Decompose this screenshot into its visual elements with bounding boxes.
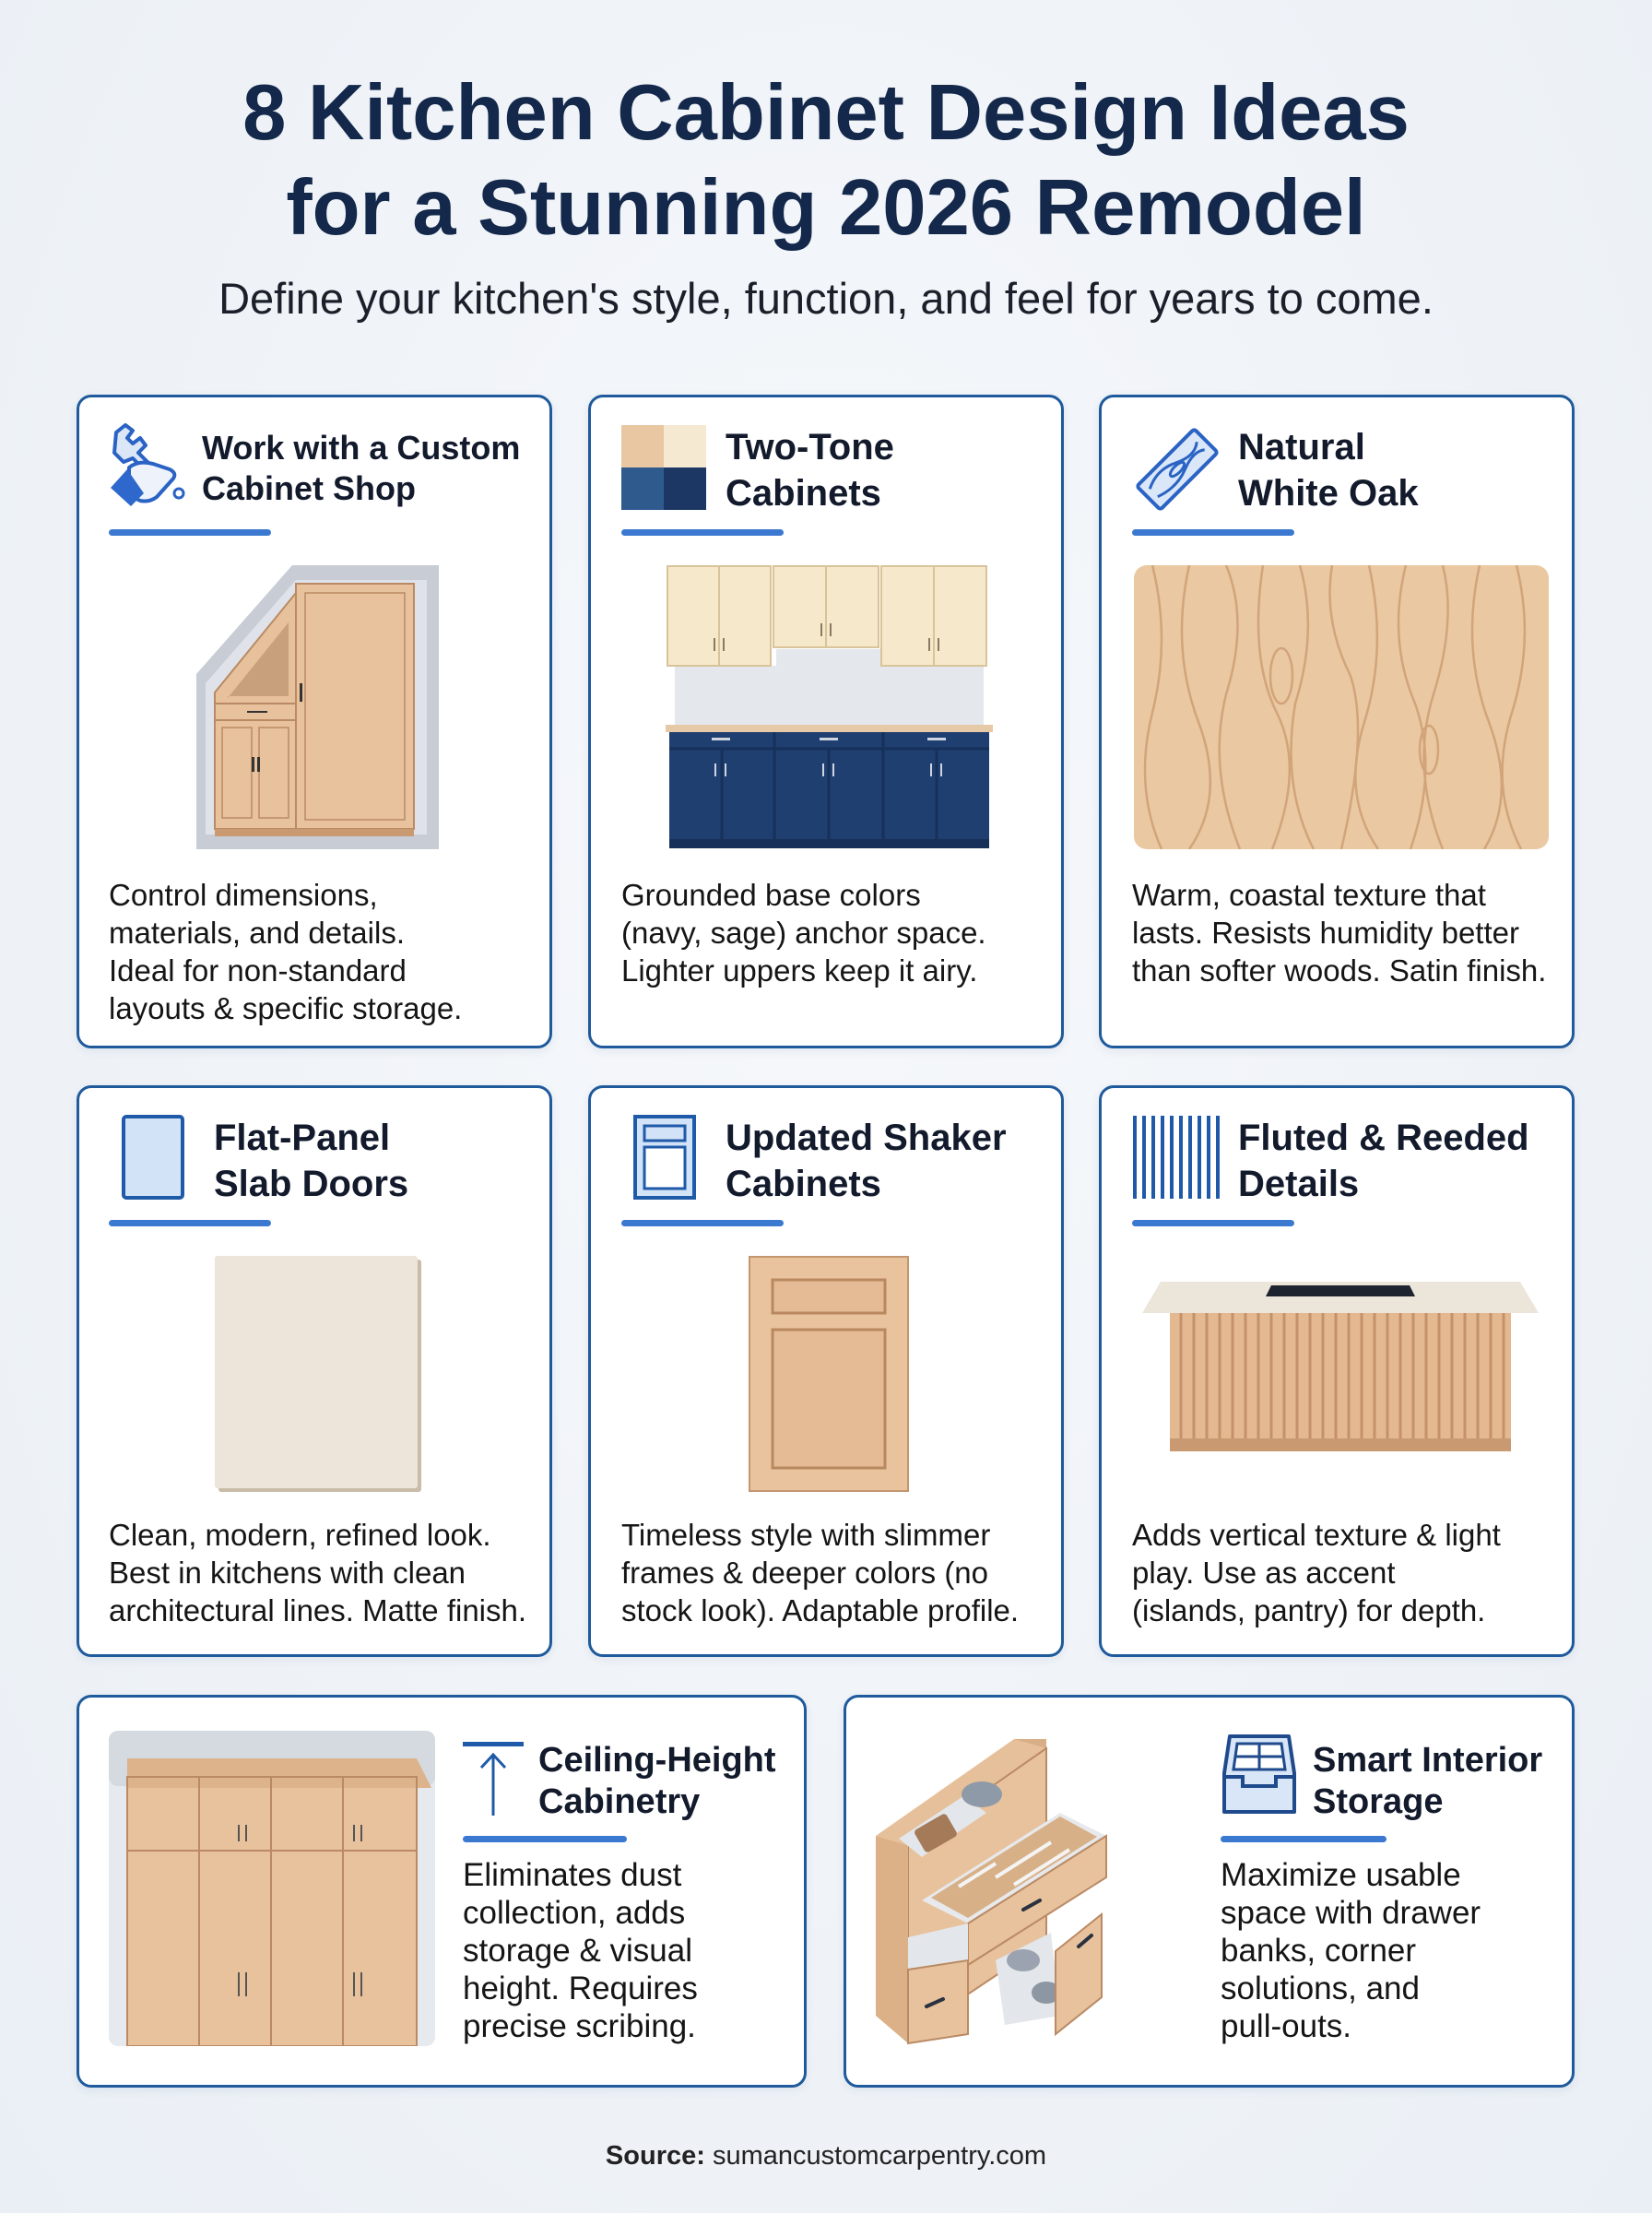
title: for a Stunning 2026 Remodel — [286, 164, 1366, 252]
illustration: open cabinet with drawers — [876, 1739, 1107, 2045]
body text: Timeless style with slimmer — [621, 1518, 990, 1552]
body text: Adds vertical texture & light — [1132, 1518, 1501, 1552]
heading: Smart Interior — [1313, 1741, 1542, 1780]
title: 8 Kitchen Cabinet Design Ideas — [242, 69, 1410, 157]
heading: Ceiling-Height — [538, 1741, 776, 1780]
illustration: oak texture — [1134, 565, 1549, 849]
body text: Lighter uppers keep it airy. — [621, 953, 977, 988]
heading: Fluted & Reeded — [1238, 1118, 1529, 1158]
body text: Best in kitchens with clean — [109, 1556, 466, 1590]
body text: precise scribing. — [463, 2008, 696, 2044]
icon: up arrow — [463, 1742, 524, 1816]
heading: Flat-Panel — [214, 1118, 390, 1158]
body text — [621, 878, 986, 988]
heading — [1238, 427, 1419, 514]
body text: Warm, coastal texture that — [1132, 878, 1486, 912]
icon: wrench hand — [111, 423, 184, 506]
body text — [1221, 1857, 1481, 2044]
illustration: under-stair cabinet — [196, 565, 439, 849]
panel: two-tone — [588, 395, 1064, 1048]
body text: frames & deeper colors (no — [621, 1556, 988, 1590]
heading: Storage — [1313, 1782, 1443, 1821]
body text: play. Use as accent — [1132, 1556, 1396, 1590]
body text — [109, 878, 462, 1025]
illustration: slab door — [215, 1256, 421, 1492]
body text: Clean, modern, refined look. — [109, 1518, 491, 1552]
body text: storage & visual — [463, 1933, 692, 1969]
heading — [538, 1741, 776, 1821]
body text: lasts. Resists humidity better — [1132, 916, 1519, 950]
icon: fluted lines — [1133, 1116, 1220, 1199]
illustration: fluted island — [1142, 1282, 1539, 1451]
body text: height. Requires — [463, 1970, 698, 2006]
icon: slab door — [122, 1115, 184, 1200]
heading: Cabinets — [726, 473, 881, 514]
body text: pull-outs. — [1221, 2008, 1351, 2044]
body text: banks, corner — [1221, 1933, 1416, 1969]
body text: Eliminates dust — [463, 1857, 681, 1893]
body text — [621, 1518, 1019, 1627]
body text: than softer woods. Satin finish. — [1132, 953, 1546, 988]
body text: Maximize usable — [1221, 1857, 1461, 1893]
heading — [1238, 1118, 1529, 1204]
heading — [202, 429, 520, 507]
heading — [726, 427, 894, 514]
body text: Control dimensions, — [109, 878, 378, 912]
body text — [1132, 1518, 1501, 1627]
body text — [1132, 878, 1546, 988]
body text: stock look). Adaptable profile. — [621, 1593, 1019, 1627]
panel: custom cabinet shop — [77, 395, 552, 1048]
panel: fluted — [1099, 1085, 1575, 1657]
icon: wood plank — [1136, 428, 1219, 511]
body text: solutions, and — [1221, 1970, 1420, 2006]
heading — [726, 1118, 1007, 1204]
body text: space with drawer — [1221, 1895, 1481, 1931]
body text — [109, 1518, 526, 1627]
body text: collection, adds — [463, 1895, 685, 1931]
panel: flat-panel — [77, 1085, 552, 1657]
icon: two-tone squares — [621, 425, 706, 510]
illustration: shaker door — [749, 1256, 909, 1492]
illustration: tall cabinets — [109, 1731, 435, 2046]
heading: Cabinets — [726, 1164, 881, 1204]
body text: (navy, sage) anchor space. — [621, 916, 986, 950]
heading — [1313, 1741, 1542, 1821]
icon: shaker door — [633, 1115, 696, 1200]
heading: Work with a Custom — [202, 429, 520, 467]
panel: white oak — [1099, 395, 1575, 1048]
body text: materials, and details. — [109, 916, 405, 950]
heading: White Oak — [1238, 473, 1419, 514]
body text: (islands, pantry) for depth. — [1132, 1593, 1485, 1627]
title — [242, 69, 1410, 252]
panel: smart storage — [844, 1695, 1575, 2088]
body text: layouts & specific storage. — [109, 991, 462, 1025]
heading: Natural — [1238, 427, 1365, 467]
body text — [463, 1857, 698, 2044]
body text: Ideal for non-standard — [109, 953, 407, 988]
source: Source: sumancustomcarpentry.com — [606, 2141, 1046, 2171]
heading: Cabinetry — [538, 1782, 700, 1821]
panel: ceiling-height — [77, 1695, 807, 2088]
heading: Cabinet Shop — [202, 469, 416, 507]
illustration: two-tone kitchen — [666, 565, 993, 848]
subtitle: Define your kitchen's style, function, and feel for years to come. — [218, 274, 1434, 323]
panel: shaker — [588, 1085, 1064, 1657]
body text: Grounded base colors — [621, 878, 921, 912]
heading: Details — [1238, 1164, 1359, 1204]
body text: architectural lines. Matte finish. — [109, 1593, 526, 1627]
heading — [214, 1118, 408, 1204]
heading: Slab Doors — [214, 1164, 408, 1204]
heading: Updated Shaker — [726, 1118, 1007, 1158]
heading: Two-Tone — [726, 427, 894, 467]
icon: drawer tray — [1222, 1734, 1296, 1814]
